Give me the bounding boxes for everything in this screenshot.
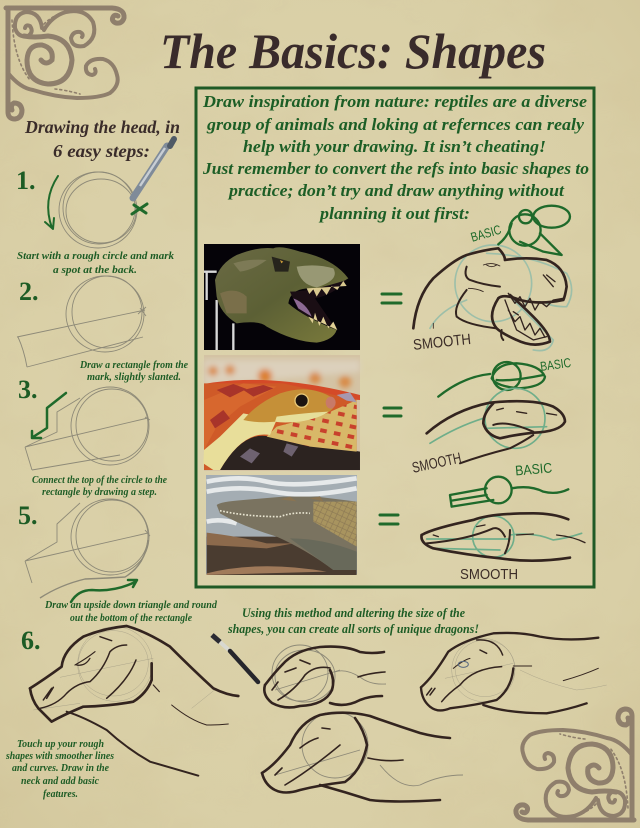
pencil sketch — [17, 276, 146, 367]
panel text: group of animals and loking at refernces can realy — [206, 115, 584, 134]
caption: out the bottom of the rectangle — [70, 613, 192, 624]
text: touch up: Touch up your rough — [17, 739, 104, 750]
caption: Draw a rectangle from the — [79, 360, 188, 371]
text: touch up: and curves. Draw in the — [12, 763, 109, 774]
rex sketch — [413, 245, 572, 351]
step 1 — [16, 139, 175, 276]
caption — [17, 251, 175, 276]
panel text — [202, 92, 589, 223]
dragon head: top right — [421, 633, 607, 713]
text: using this method: shapes, you can create all sorts of unique dragons! — [227, 621, 479, 636]
ornament: bottom right corner — [516, 709, 634, 820]
dragon head: bottom middle — [262, 712, 463, 802]
caption: a spot at the back. — [53, 265, 137, 276]
caption: Start with a rough circle and mark — [17, 251, 175, 262]
icon: paintbrush — [212, 635, 258, 682]
label: smooth: SMOOTH — [412, 331, 472, 354]
label: basic: BASIC — [539, 355, 572, 374]
pencil sketch — [25, 387, 150, 470]
caption — [79, 360, 188, 383]
snake sketch — [427, 388, 565, 463]
caption: mark, slightly slanted. — [87, 372, 181, 383]
equals sign — [380, 515, 398, 524]
green arrow — [45, 176, 58, 229]
caption — [44, 600, 218, 624]
step 2: 2. — [19, 277, 38, 306]
text: using this method — [227, 605, 479, 636]
green arrow — [71, 580, 137, 602]
title: The Basics: Shapes — [160, 23, 546, 79]
caption — [32, 475, 167, 498]
icon: pen — [133, 139, 174, 198]
step 5: 5. — [18, 501, 38, 530]
step 3: 3. — [18, 375, 38, 404]
panel text: practice; don’t try and draw anything without — [227, 181, 565, 200]
label: smooth: SMOOTH — [410, 450, 463, 477]
label: basic: BASIC — [514, 459, 553, 479]
left heading: 6 easy steps: — [53, 141, 150, 161]
ornament: top left corner — [6, 8, 124, 119]
green x mark — [132, 204, 147, 214]
main dragon head — [30, 626, 238, 776]
photo: snake — [203, 355, 360, 471]
label: basic: BASIC — [469, 222, 503, 245]
rex basic shapes — [498, 206, 570, 255]
equals sign — [382, 294, 401, 303]
equals sign — [384, 408, 401, 416]
green arrow — [32, 393, 66, 438]
text: touch up: features. — [43, 789, 78, 800]
step 3 — [18, 375, 167, 498]
step 6 number: 6. — [21, 626, 40, 655]
panel text: planning it out first: — [318, 204, 470, 223]
snake basic shapes — [438, 362, 545, 397]
pencil sketch circle — [59, 172, 137, 248]
caption: rectangle by drawing a step. — [42, 487, 157, 498]
panel text: help with your drawing. It isn’t cheating! — [243, 137, 546, 156]
text: using this method: Using this method and altering the size of the — [242, 605, 465, 620]
croc basic shapes — [450, 477, 568, 507]
left heading — [24, 117, 180, 161]
label: smooth: SMOOTH — [460, 566, 518, 583]
text: touch up: shapes with smoother lines — [5, 751, 114, 762]
panel text: Just remember to convert the refs into basic shapes to — [202, 159, 589, 178]
pencil sketch — [25, 499, 150, 598]
caption: Draw an upside down triangle and round — [44, 600, 218, 611]
photo: crocodile — [206, 475, 357, 575]
text: touch up: neck and add basic — [21, 776, 99, 787]
step 2 — [17, 276, 188, 383]
step 5 — [18, 499, 218, 624]
panel: inspiration — [196, 88, 594, 587]
text: touch up — [5, 739, 114, 800]
dragon head: top middle — [264, 645, 386, 707]
croc sketch — [421, 513, 585, 561]
caption: Connect the top of the circle to the — [32, 475, 167, 486]
step 1: 1. — [16, 166, 36, 195]
panel text: Draw inspiration from nature: reptiles are a diverse — [202, 92, 587, 111]
left heading: Drawing the head, in — [24, 117, 180, 137]
photo: t-rex — [204, 244, 360, 350]
